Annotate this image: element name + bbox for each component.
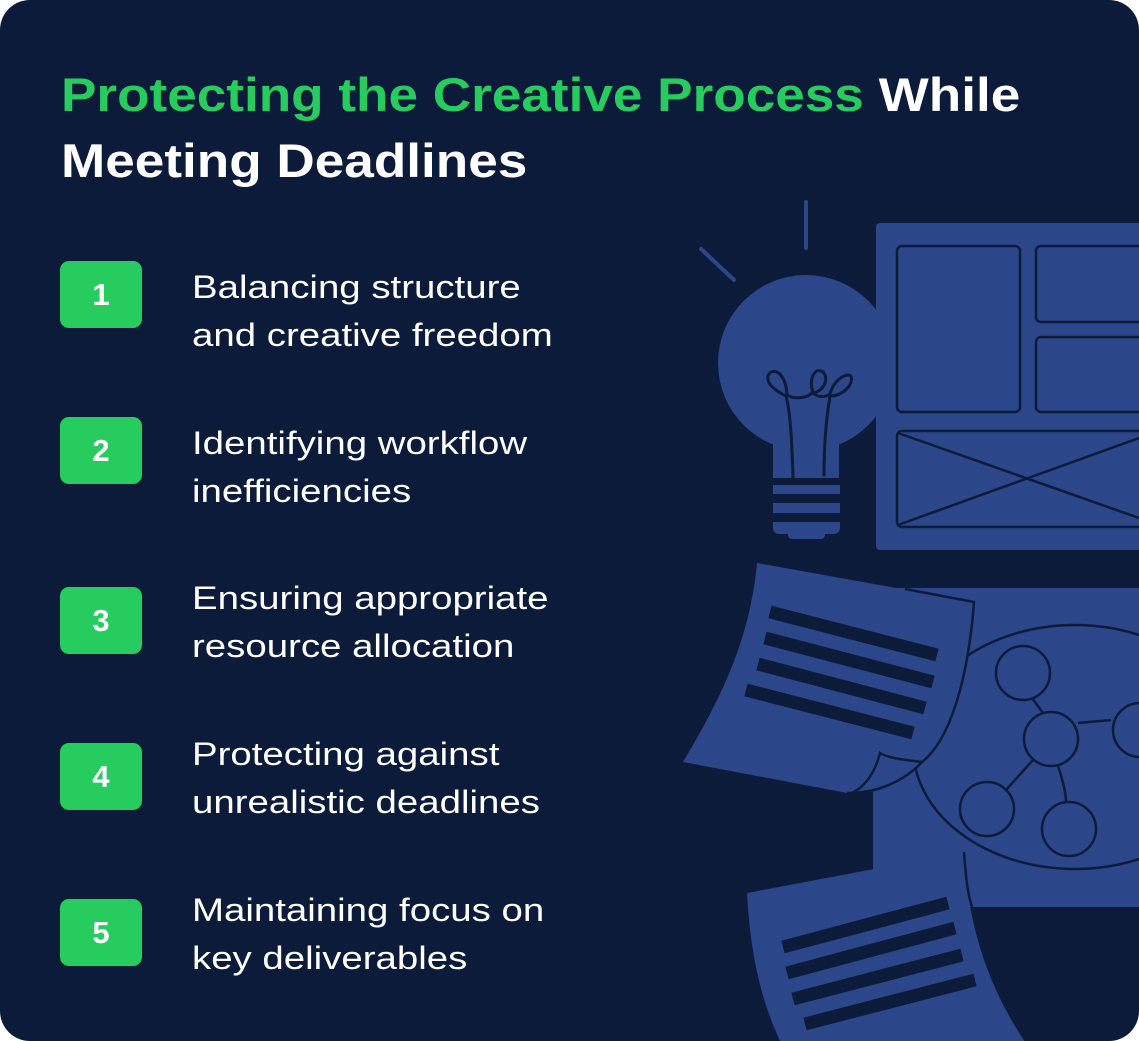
paper note 2 xyxy=(747,852,1027,1041)
item 1 xyxy=(60,261,553,353)
badge 4: 4 xyxy=(92,759,110,794)
text 5: key deliverables xyxy=(192,940,467,976)
text 4 xyxy=(192,736,540,820)
badge 3 xyxy=(60,587,142,654)
text 2 xyxy=(192,425,528,509)
text 3: Ensuring appropriate xyxy=(192,580,548,616)
item 4 xyxy=(60,736,540,820)
network diagram board xyxy=(873,588,1139,907)
text 2: Identifying workflow xyxy=(192,425,527,461)
item 5 xyxy=(60,892,544,976)
text 5: Maintaining focus on xyxy=(192,892,544,928)
text 3 xyxy=(192,580,548,664)
badge 1: 1 xyxy=(92,277,110,312)
wireframe board xyxy=(876,223,1139,550)
title: Meeting Deadlines xyxy=(61,134,527,187)
title xyxy=(61,68,1020,187)
text 5 xyxy=(192,892,544,976)
badge 3: 3 xyxy=(92,603,110,638)
badge 5 xyxy=(60,899,142,966)
badge 2 xyxy=(60,417,142,484)
badge 5: 5 xyxy=(92,915,110,950)
text 1: and creative freedom xyxy=(192,317,553,353)
paper note 1 xyxy=(683,563,974,793)
text 2: inefficiencies xyxy=(192,473,411,509)
text 3: resource allocation xyxy=(192,628,514,664)
text 4: Protecting against xyxy=(192,736,499,772)
item 3 xyxy=(60,580,548,664)
title: Protecting the Creative Process While xyxy=(61,68,1020,121)
badge 4 xyxy=(60,743,142,810)
text 1: Balancing structure xyxy=(192,269,521,305)
badge 1 xyxy=(60,261,142,328)
badge 2: 2 xyxy=(92,433,110,468)
text 1 xyxy=(192,269,553,353)
icon: light bulb xyxy=(701,202,894,539)
text 4: unrealistic deadlines xyxy=(192,784,540,820)
item 2 xyxy=(60,417,528,509)
